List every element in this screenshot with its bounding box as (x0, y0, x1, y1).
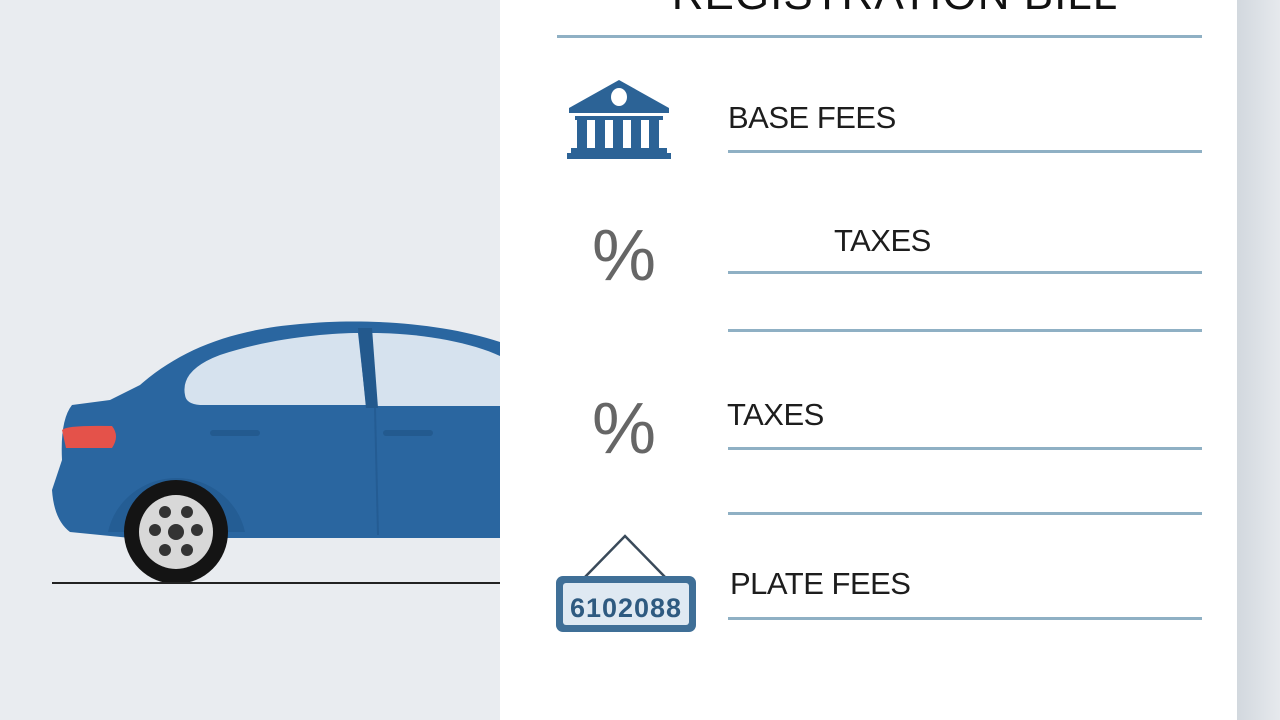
right shadow strip (1237, 0, 1280, 720)
label: base fees: BASE FEES (728, 100, 896, 135)
icon: license plate: 6102088 (570, 593, 682, 623)
icon: bank (567, 80, 671, 159)
icon: percent 2: % (592, 389, 656, 469)
label: plate fees: PLATE FEES (730, 566, 910, 601)
wheel (124, 480, 228, 584)
panel: registration bill (500, 0, 1237, 720)
label: taxes 2: TAXES (727, 397, 824, 432)
label: taxes 1: TAXES (834, 223, 931, 258)
icon: license plate (556, 534, 696, 632)
icon: percent 1: % (592, 216, 656, 296)
car body (52, 321, 500, 538)
car illustration (52, 322, 500, 584)
